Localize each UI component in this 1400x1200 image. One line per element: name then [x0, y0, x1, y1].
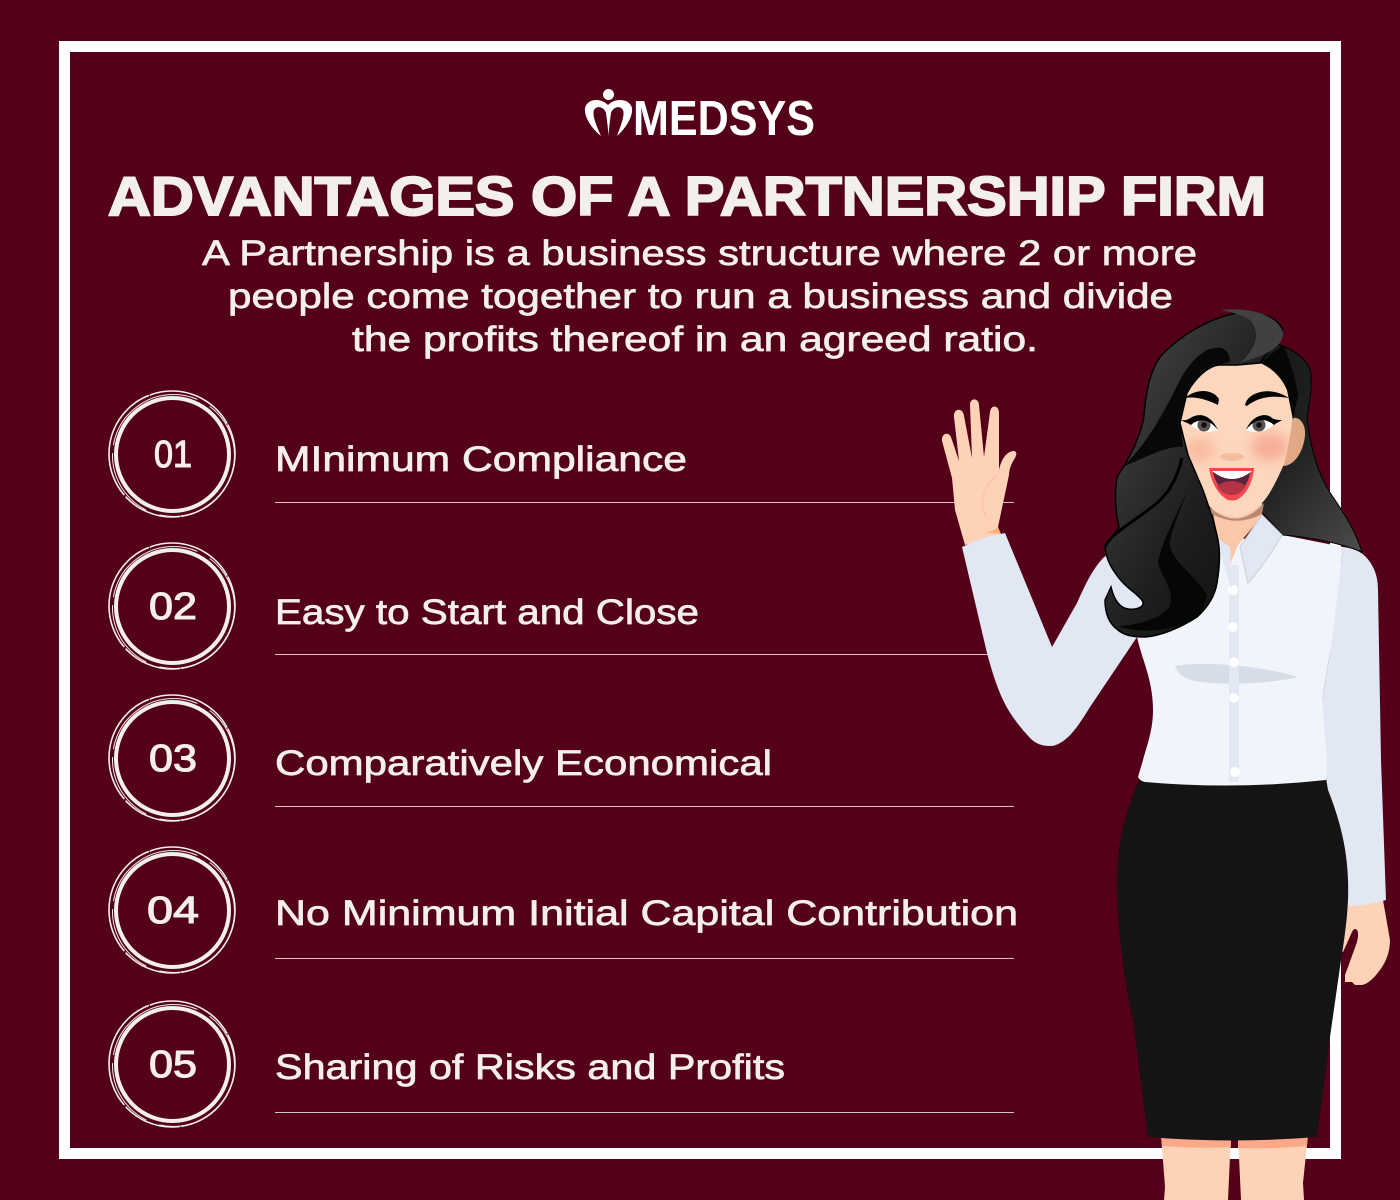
- label 02: Easy to Start and Close: [275, 593, 699, 632]
- legs: [1161, 1135, 1308, 1200]
- number badge 05: 05: [149, 1044, 197, 1086]
- torso shirt: [1130, 535, 1343, 786]
- title: ADVANTAGES OF A PARTNERSHIP FIRM: [108, 165, 1266, 227]
- logo wordmark: MEDSYS: [633, 92, 815, 146]
- label 01: MInimum Compliance: [275, 440, 687, 479]
- eyes: [1181, 415, 1282, 432]
- neck: [1208, 490, 1262, 565]
- number badge 05: [109, 1001, 235, 1127]
- item 04: [109, 847, 1018, 973]
- label 05: Sharing of Risks and Profits: [275, 1048, 785, 1087]
- logo: [585, 89, 815, 146]
- item 05: [109, 1001, 1014, 1127]
- number badge 02: 02: [149, 586, 197, 628]
- eyebrows: [1185, 391, 1219, 405]
- number badge 01: 01: [154, 434, 192, 476]
- illustration: businesswoman waving: [942, 309, 1390, 1200]
- number badge 02: [109, 543, 235, 669]
- shirt details: [1175, 565, 1298, 782]
- jaw shadow: [1205, 503, 1264, 521]
- item 01: [109, 391, 1014, 517]
- label 03: Comparatively Economical: [275, 744, 772, 783]
- face shape: [1180, 363, 1293, 517]
- intro paragraph: people come together to run a business and divide: [228, 277, 1173, 316]
- hanging sleeve: [1315, 547, 1386, 906]
- hair front: [1105, 309, 1298, 637]
- number badge 03: [109, 695, 235, 821]
- hair dark strands: [1123, 348, 1230, 467]
- intro paragraph: [202, 234, 1197, 359]
- hair back: [1116, 313, 1362, 600]
- collar: [1217, 515, 1282, 590]
- raised hand: [942, 399, 1016, 545]
- item 02: [109, 543, 1014, 669]
- icon: logo figure: [585, 89, 632, 136]
- item 03: [109, 695, 1014, 821]
- number badge 01: [109, 391, 235, 517]
- intro paragraph: A Partnership is a business structure where 2 or more: [202, 234, 1197, 273]
- nose: [1220, 453, 1244, 461]
- intro paragraph: the profits thereof in an agreed ratio.: [352, 320, 1038, 359]
- blush: [1185, 438, 1215, 462]
- number badge 03: 03: [149, 738, 197, 780]
- face: [1180, 363, 1305, 521]
- skirt: [1117, 778, 1348, 1140]
- number badge 04: [109, 847, 235, 973]
- lowered hand: [1335, 900, 1390, 985]
- label 04: No Minimum Initial Capital Contribution: [275, 894, 1018, 933]
- number badge 04: 04: [147, 890, 199, 932]
- ear: [1283, 418, 1305, 466]
- raised sleeve: [962, 533, 1140, 746]
- mouth: [1209, 468, 1254, 500]
